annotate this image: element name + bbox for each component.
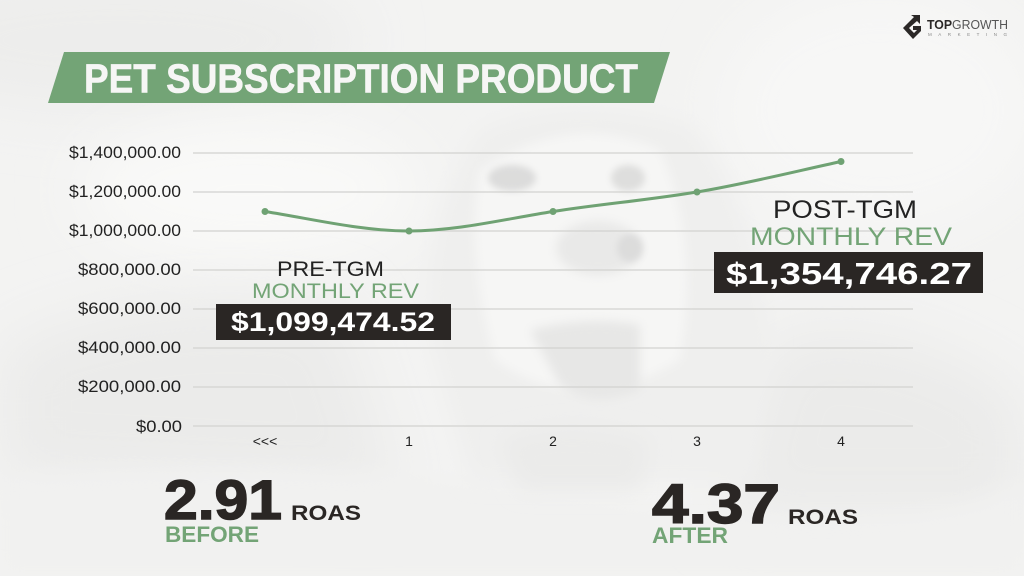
x axis labels: <<< bbox=[253, 433, 277, 449]
stat: after ROAS: AFTER bbox=[652, 523, 728, 548]
y axis labels: $1,200,000.00 bbox=[69, 182, 181, 201]
x axis labels: 3 bbox=[693, 433, 701, 449]
revenue line bbox=[265, 162, 841, 231]
callout: pre-TGM monthly revenue: $1,099,474.52 bbox=[231, 307, 435, 337]
title text: PET SUBSCRIPTION PRODUCT bbox=[84, 56, 638, 102]
stat: before ROAS bbox=[164, 468, 361, 547]
title banner bbox=[48, 52, 670, 103]
stat: before ROAS: ROAS bbox=[291, 502, 361, 525]
line chart bbox=[69, 143, 913, 449]
callout: post-TGM monthly revenue: MONTHLY REV bbox=[750, 223, 952, 251]
stat: after ROAS bbox=[652, 472, 858, 548]
stat: after ROAS: 4.37 bbox=[652, 472, 780, 535]
callout: post-TGM monthly revenue: $1,354,746.27 bbox=[726, 256, 972, 291]
x axis labels: 2 bbox=[549, 433, 557, 449]
logo: Top Growth Marketing bbox=[903, 15, 1008, 39]
callout: pre-TGM monthly revenue bbox=[216, 258, 451, 340]
callout: pre-TGM monthly revenue: PRE-TGM bbox=[277, 258, 384, 281]
y axis labels: $400,000.00 bbox=[78, 338, 181, 357]
x axis labels: 4 bbox=[837, 433, 845, 449]
icon: logo mark bbox=[903, 15, 921, 39]
y axis labels: $200,000.00 bbox=[78, 377, 181, 396]
y axis labels: $1,000,000.00 bbox=[69, 221, 181, 240]
stat: before ROAS: 2.91 bbox=[164, 468, 282, 531]
y axis labels bbox=[69, 143, 182, 436]
logo wordmark: TOPGROWTH bbox=[927, 17, 1008, 32]
callout: post-TGM monthly revenue: POST-TGM bbox=[773, 196, 917, 224]
y axis labels: $1,400,000.00 bbox=[69, 143, 181, 162]
logo subtitle: MARKETING bbox=[928, 32, 1007, 37]
callout: post-TGM monthly revenue bbox=[714, 196, 983, 293]
data points bbox=[262, 158, 844, 234]
x axis labels: 1 bbox=[405, 433, 413, 449]
stat: before ROAS: BEFORE bbox=[165, 522, 259, 547]
grid lines bbox=[193, 153, 913, 426]
stat: after ROAS: ROAS bbox=[788, 506, 858, 529]
y axis labels: $600,000.00 bbox=[78, 299, 181, 318]
y axis labels: $800,000.00 bbox=[78, 260, 181, 279]
callout: pre-TGM monthly revenue: MONTHLY REV bbox=[252, 280, 419, 303]
y axis labels: $0.00 bbox=[136, 417, 182, 436]
x axis labels bbox=[253, 433, 845, 449]
